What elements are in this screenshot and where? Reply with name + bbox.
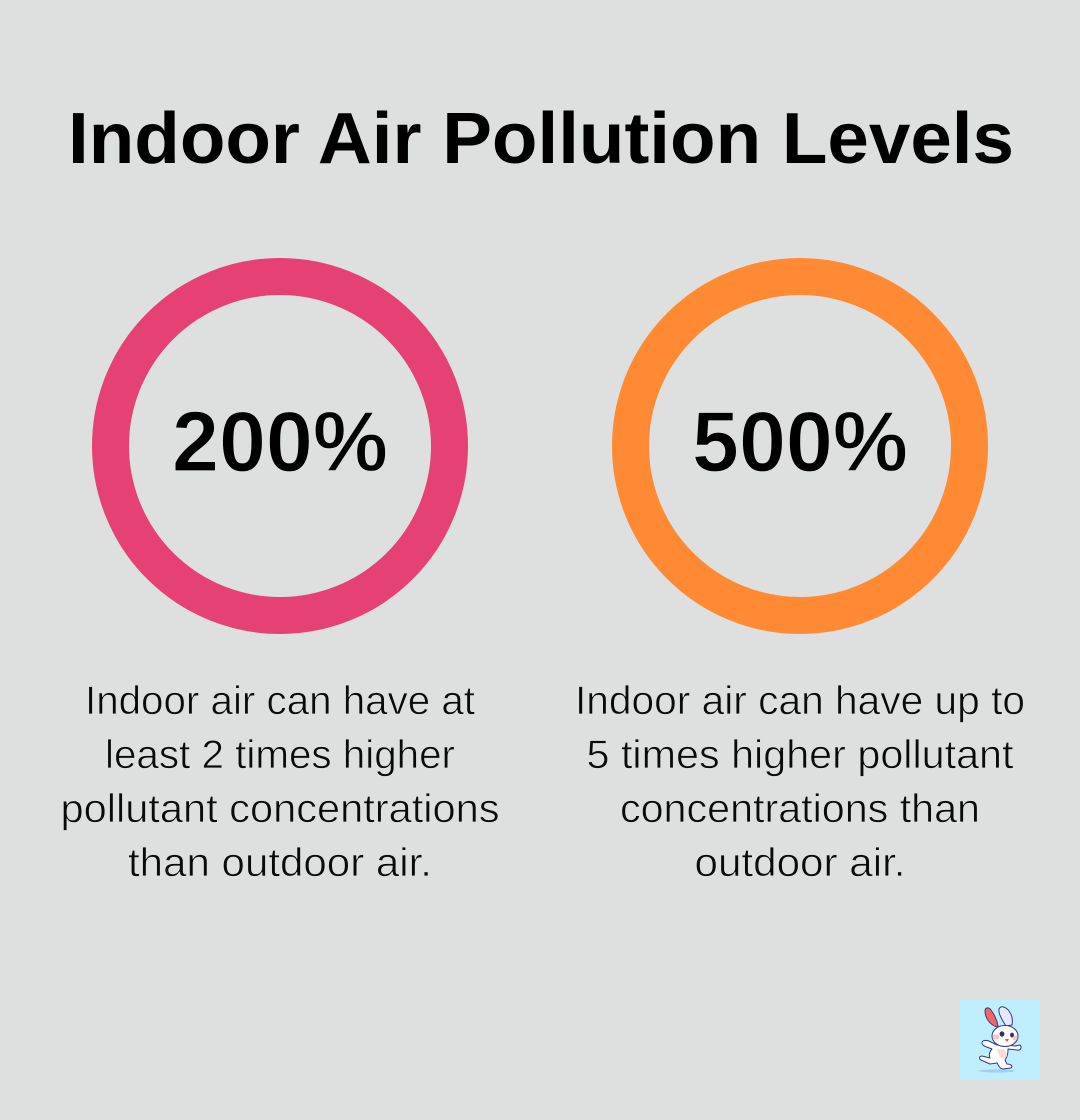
description: 500%: outdoor air. — [694, 841, 906, 885]
ring: pink — [110, 276, 450, 616]
description: 200% — [60, 679, 499, 885]
description: 500%: 5 times higher pollutant — [586, 733, 1014, 777]
value: 200%: 200% — [172, 395, 388, 490]
description: 200%: Indoor air can have at — [85, 679, 475, 723]
title: Indoor Air Pollution Levels — [68, 99, 1014, 179]
description: 200%: pollutant concentrations — [60, 787, 499, 831]
description: 500% — [575, 679, 1025, 885]
description: 500%: concentrations than — [620, 787, 980, 831]
value: 500%: 500% — [692, 395, 908, 490]
icon: rabbit logo — [960, 1000, 1040, 1080]
panel: 500% statistic — [575, 276, 1025, 885]
panel: 200% statistic — [60, 276, 499, 885]
description: 200%: least 2 times higher — [105, 733, 455, 777]
ring: orange — [630, 276, 970, 616]
description: 200%: than outdoor air. — [128, 841, 432, 885]
description: 500%: Indoor air can have up to — [575, 679, 1025, 723]
